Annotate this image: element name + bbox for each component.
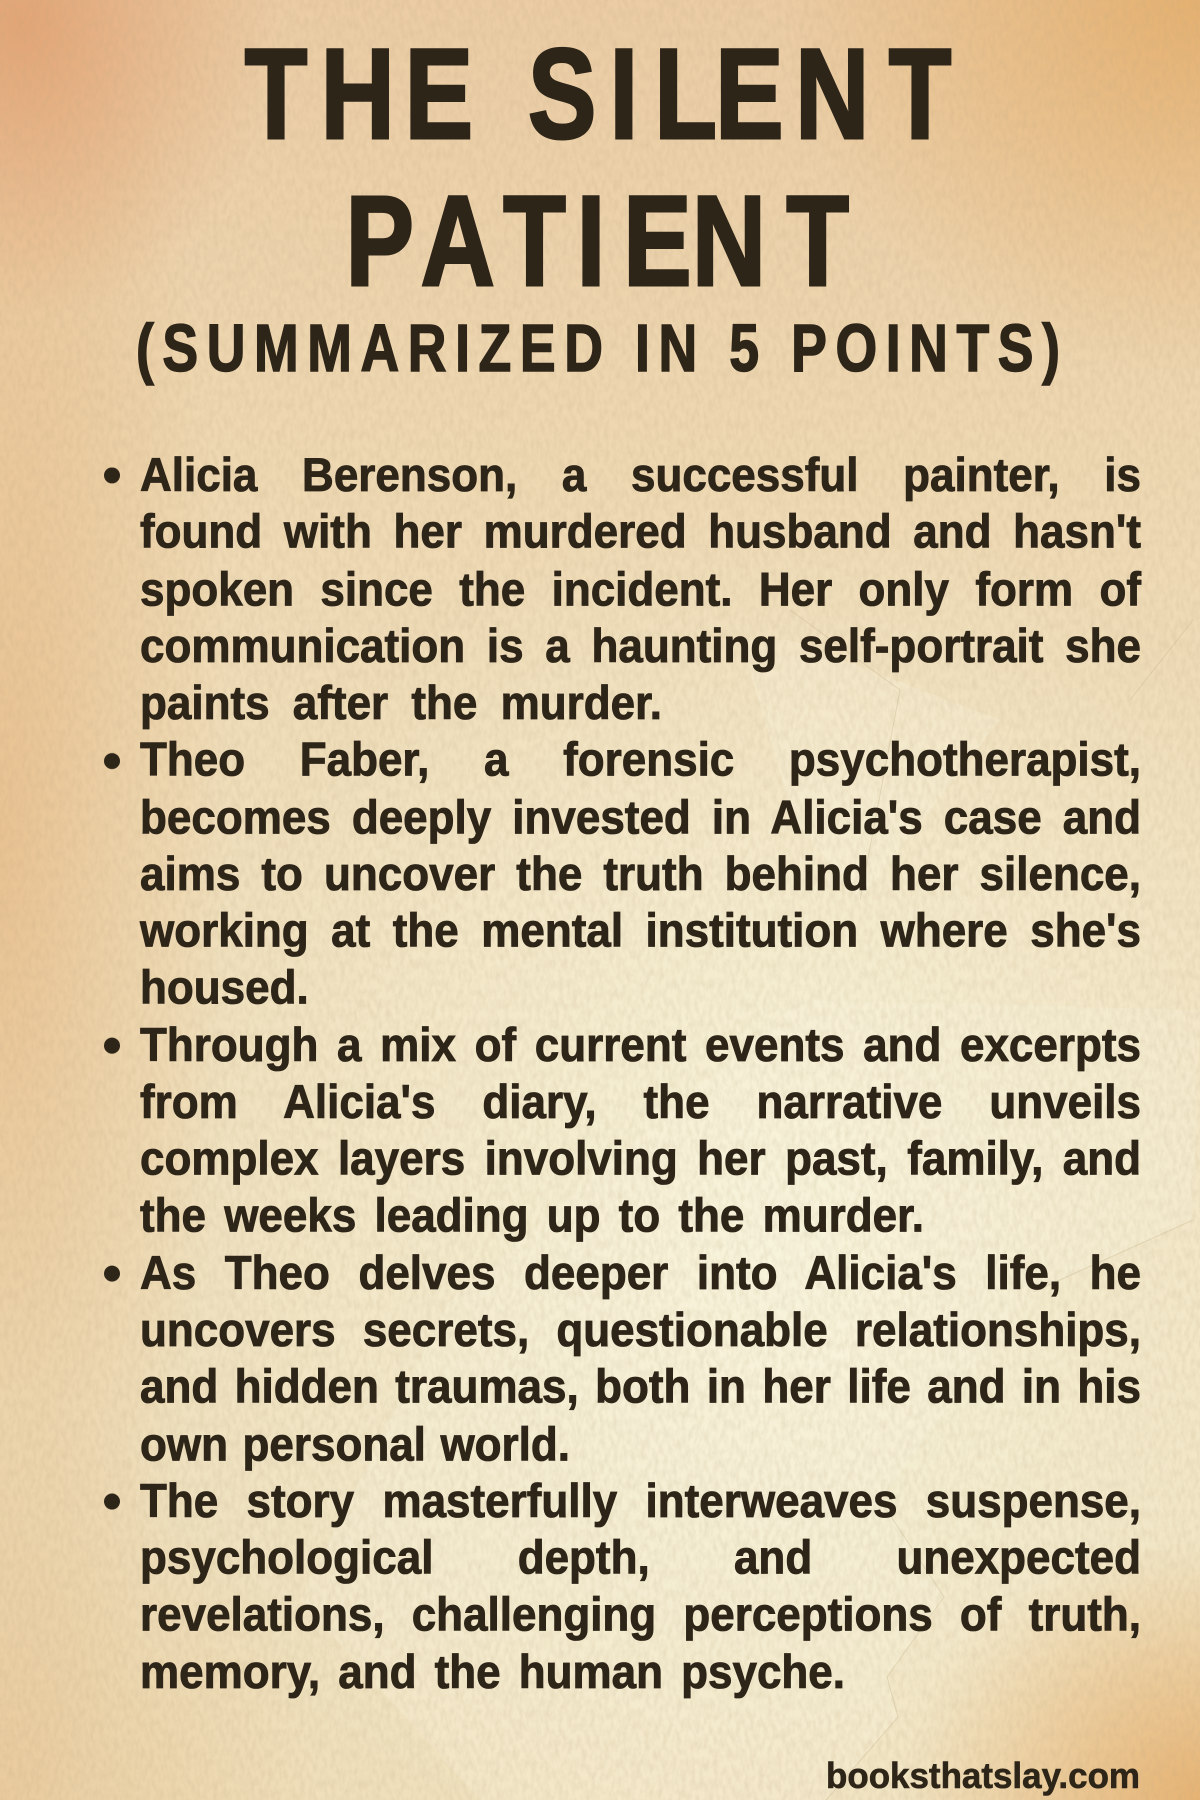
point 5: The story masterfully interweaves suspense, — [140, 1475, 1141, 1527]
point 2: Theo Faber, a forensic psychotherapist, — [140, 734, 1141, 787]
point 5: psychological depth, and unexpected — [140, 1532, 1141, 1584]
point 1: paints after the murder. — [140, 677, 662, 730]
point 3: from Alicia's diary, the narrative unveils — [140, 1076, 1141, 1129]
point 1: found with her murdered husband and hasn't — [140, 506, 1141, 559]
subtitle: (SUMMARIZED IN 5 POINTS) — [136, 310, 1060, 385]
point 4: As Theo delves deeper into Alicia's life, he — [140, 1247, 1141, 1299]
point 5 — [104, 1282, 1141, 1698]
point 2 — [104, 734, 1141, 1015]
title line 1: THESILENT — [245, 22, 951, 166]
footer website credit: booksthatslay.com — [826, 1755, 1140, 1796]
point 4: own personal world. — [140, 1418, 570, 1470]
bullet list of five summary points — [104, 449, 1142, 1698]
point 1: spoken since the incident. Her only form of — [140, 563, 1141, 616]
point 1 — [104, 449, 1142, 1510]
point 5: revelations, challenging perceptions of truth, — [140, 1589, 1141, 1641]
point 4: and hidden traumas, both in her life and in his — [140, 1361, 1141, 1413]
point 1: Alicia Berenson, a successful painter, is — [140, 449, 1141, 502]
point 4: uncovers secrets, questionable relationships, — [140, 1304, 1141, 1356]
point 2: working at the mental institution where she's — [140, 905, 1141, 958]
point 2: becomes deeply invested in Alicia's case and — [140, 791, 1141, 844]
title line 2: PATIENT — [346, 169, 849, 313]
point 3: the weeks leading up to the murder. — [140, 1190, 924, 1242]
point 3: Through a mix of current events and excerpts — [140, 1019, 1141, 1072]
point 2: aims to uncover the truth behind her silence, — [140, 848, 1141, 901]
point 1: communication is a haunting self-portrait she — [140, 620, 1141, 673]
point 4 — [104, 1247, 1141, 1471]
point 3: complex layers involving her past, family, and — [140, 1133, 1141, 1186]
point 5: memory, and the human psyche. — [140, 1646, 845, 1698]
point 3 — [104, 1019, 1141, 1242]
point 2: housed. — [140, 962, 309, 1015]
heading block — [136, 22, 1060, 386]
